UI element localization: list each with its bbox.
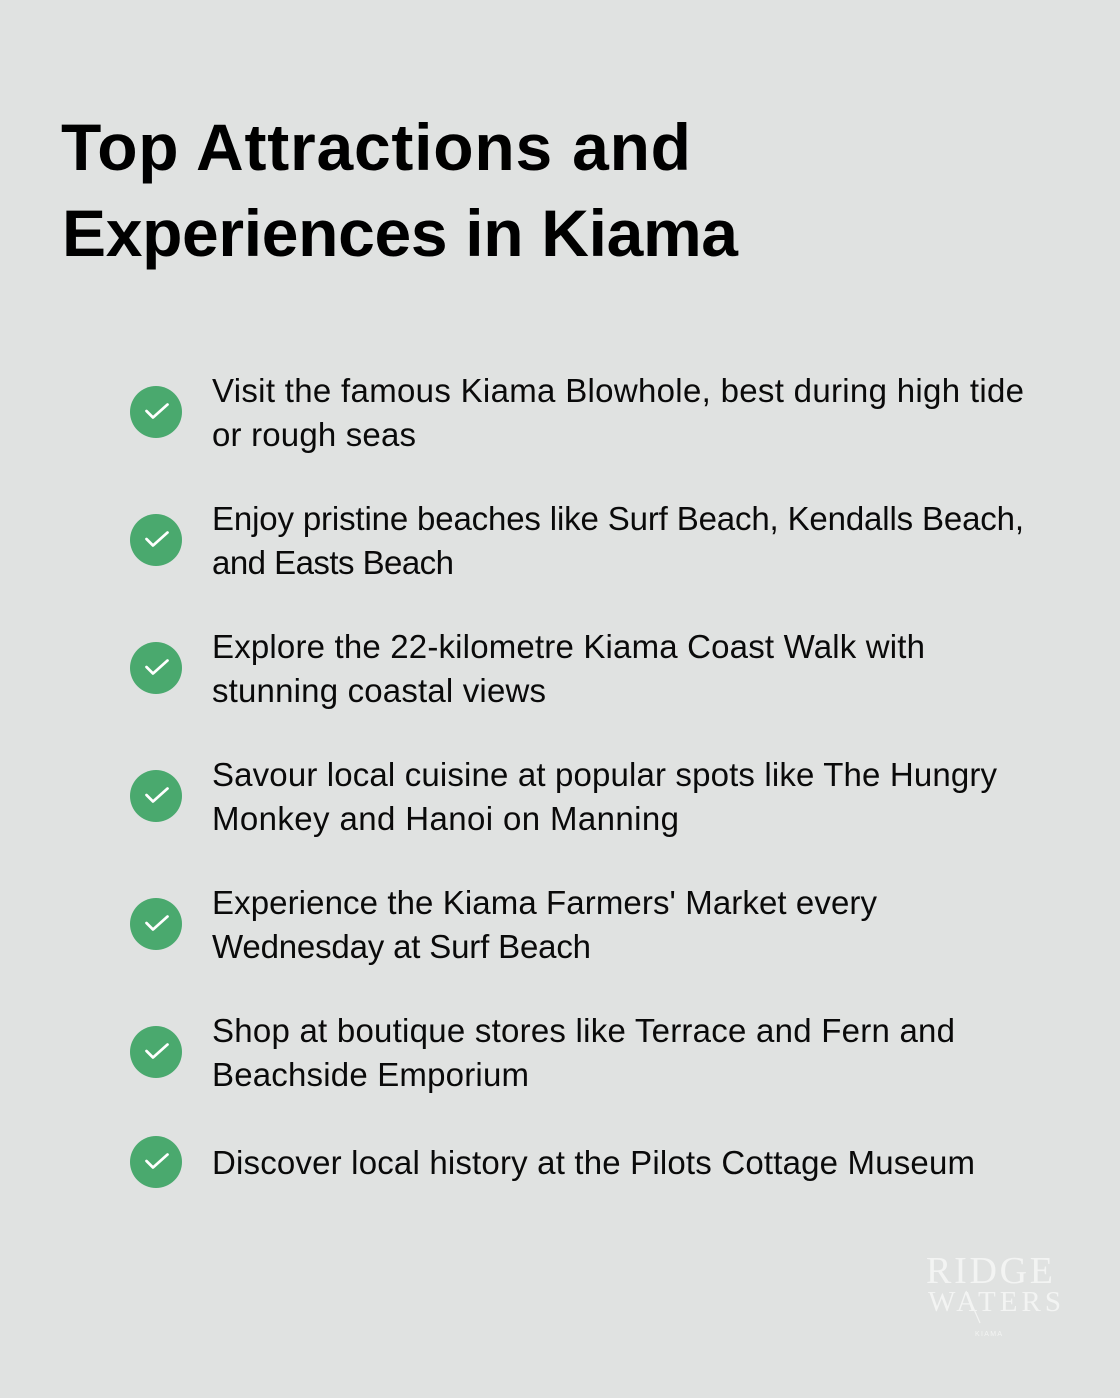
item text [212,756,998,837]
icon: check mark [130,642,182,694]
icon: check mark [130,386,182,438]
icon: check mark [130,1026,182,1078]
logo: Ridge Waters Kiama [926,1250,1061,1338]
item text: stunning coastal views [212,672,546,709]
item text [212,500,1024,581]
item text: Monkey and Hanoi on Manning [212,800,679,837]
item text: Enjoy pristine beaches like Surf Beach, Kendalls Beach, [212,500,1024,537]
item: local cuisine [130,756,998,837]
item text [212,372,1024,453]
item text [212,884,878,965]
item text: or rough seas [212,416,416,453]
item: Kiama Blowhole [130,372,1024,453]
checklist [130,372,1024,1188]
title: Experiences in Kiama [62,196,739,270]
item text: Explore the 22-kilometre Kiama Coast Walk with [212,628,925,665]
logo: Ridge Waters Kiama: RIDGE [926,1250,1053,1292]
logo: Ridge Waters Kiama: WATERS [928,1286,1061,1318]
icon: check mark [130,514,182,566]
item text: Shop at boutique stores like Terrace and Fern and [212,1012,955,1049]
item text: Visit the famous Kiama Blowhole, best during high tide [212,372,1024,409]
item: coast walk [130,628,925,709]
item: beaches [130,500,1024,581]
logo: Ridge Waters Kiama: KIAMA [975,1331,1002,1338]
icon: check mark [130,1136,182,1188]
item text: Savour local cuisine at popular spots like The Hungry [212,756,998,793]
item text: Wednesday at Surf Beach [212,928,591,965]
item text: Discover local history at the Pilots Cottage Museum [212,1144,975,1181]
icon: check mark [130,898,182,950]
icon: check mark [130,770,182,822]
item text [212,628,925,709]
item text: Beachside Emporium [212,1056,529,1093]
title: Top Attractions and [61,110,691,184]
item text: and Easts Beach [212,544,454,581]
item text: Experience the Kiama Farmers' Market every [212,884,878,921]
item: local history [130,1136,975,1188]
title [61,110,739,270]
item text [212,1012,955,1093]
item: farmers market [130,884,878,965]
item: boutique stores [130,1012,955,1093]
